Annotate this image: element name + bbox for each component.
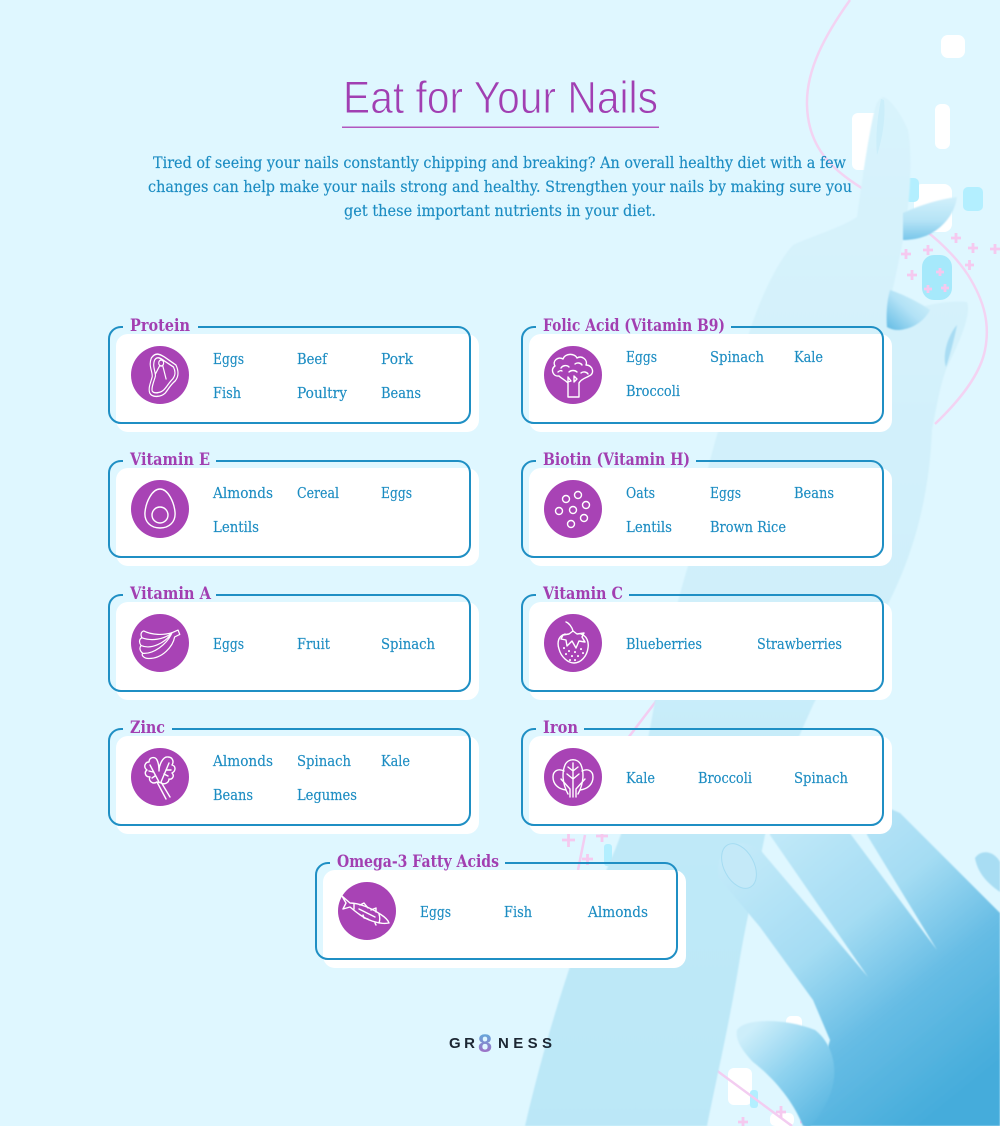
items: Beans: [213, 788, 253, 804]
items: Blueberries: [626, 637, 702, 653]
items: Spinach: [710, 350, 764, 366]
items: Fish: [504, 905, 532, 921]
items: [212, 754, 410, 804]
panel: iron: [522, 718, 892, 834]
logo: NESS: [498, 1035, 552, 1052]
logo: 8: [478, 1030, 492, 1058]
items: Lentils: [626, 520, 672, 536]
icon: fish: [338, 882, 396, 940]
heading: vitamin e: Vitamin E: [129, 450, 210, 469]
items: [626, 637, 842, 653]
intro text: [148, 153, 852, 220]
heading: vitamin c: Vitamin C: [542, 584, 623, 603]
items: Eggs: [710, 486, 741, 502]
panel: zinc: [109, 718, 479, 834]
logo: [449, 1030, 552, 1058]
panel: vitamin c: [522, 584, 892, 700]
items: [212, 486, 412, 536]
items: Almonds: [212, 486, 273, 502]
items: Broccoli: [626, 384, 680, 400]
heading: biotin: Biotin (Vitamin H): [543, 450, 690, 469]
icon: steak: [131, 346, 189, 404]
intro text: get these important nutrients in your diet.: [344, 201, 656, 220]
items: Spinach: [794, 771, 848, 787]
items: Eggs: [213, 637, 244, 653]
items: Cereal: [297, 486, 339, 502]
heading: zinc: Zinc: [130, 718, 165, 737]
icon: spinach: [544, 748, 602, 806]
illustration: lower hand: [714, 800, 1000, 1126]
icon: broccoli: [544, 346, 602, 404]
heading: protein: Protein: [130, 316, 190, 335]
items: Almonds: [587, 905, 648, 921]
icon: oats: [544, 480, 602, 538]
items: Lentils: [213, 520, 259, 536]
title: Eat for Your Nails: [343, 72, 658, 123]
logo: GR: [449, 1035, 475, 1052]
panel: vitamin e: [109, 450, 479, 566]
intro text: Tired of seeing your nails constantly chipping and breaking? An overall healthy diet with a few: [153, 153, 846, 172]
items: Poultry: [297, 386, 348, 402]
intro text: changes can help make your nails strong and healthy. Strengthen your nails by making sure you: [148, 177, 852, 196]
items: Beans: [381, 386, 421, 402]
heading: folic acid: Folic Acid (Vitamin B9): [543, 316, 725, 335]
items: [626, 350, 823, 400]
panel: biotin: [522, 450, 892, 566]
items: Kale: [794, 350, 823, 366]
items: Broccoli: [698, 771, 752, 787]
items: Kale: [381, 754, 410, 770]
heading: omega-3 fatty acids: Omega-3 Fatty Acids: [337, 852, 499, 871]
items: [420, 905, 648, 921]
items: Strawberries: [757, 637, 842, 653]
items: Pork: [381, 352, 413, 368]
icon: avocado: [131, 480, 189, 538]
items: Kale: [626, 771, 655, 787]
items: Legumes: [297, 788, 357, 804]
items: Eggs: [420, 905, 451, 921]
items: Fish: [213, 386, 241, 402]
items: [626, 771, 848, 787]
items: Beans: [794, 486, 834, 502]
items: [213, 637, 435, 653]
panel: vitamin a: [109, 584, 479, 700]
heading: vitamin a: Vitamin A: [129, 584, 211, 603]
panel: protein: [109, 316, 479, 432]
panel: omega-3 fatty acids: [316, 852, 686, 968]
items: Spinach: [297, 754, 351, 770]
items: Brown Rice: [710, 520, 786, 536]
items: Eggs: [626, 350, 657, 366]
items: Oats: [626, 486, 655, 502]
heading: iron: Iron: [543, 718, 578, 737]
title underline: [342, 126, 659, 128]
decorative pink curve and nail shapes: [562, 0, 1000, 1126]
icon: bananas: [131, 614, 189, 672]
items: [626, 486, 834, 536]
items: Beef: [297, 352, 328, 368]
items: Eggs: [381, 486, 412, 502]
panel: folic acid: [522, 316, 892, 432]
items: Spinach: [381, 637, 435, 653]
icon: strawberry: [544, 614, 602, 672]
illustration: raised hand and arm: [525, 97, 968, 1126]
items: Eggs: [213, 352, 244, 368]
items: [213, 352, 421, 402]
icon: kale leaf: [131, 748, 189, 806]
items: Fruit: [297, 637, 330, 653]
items: Almonds: [212, 754, 273, 770]
